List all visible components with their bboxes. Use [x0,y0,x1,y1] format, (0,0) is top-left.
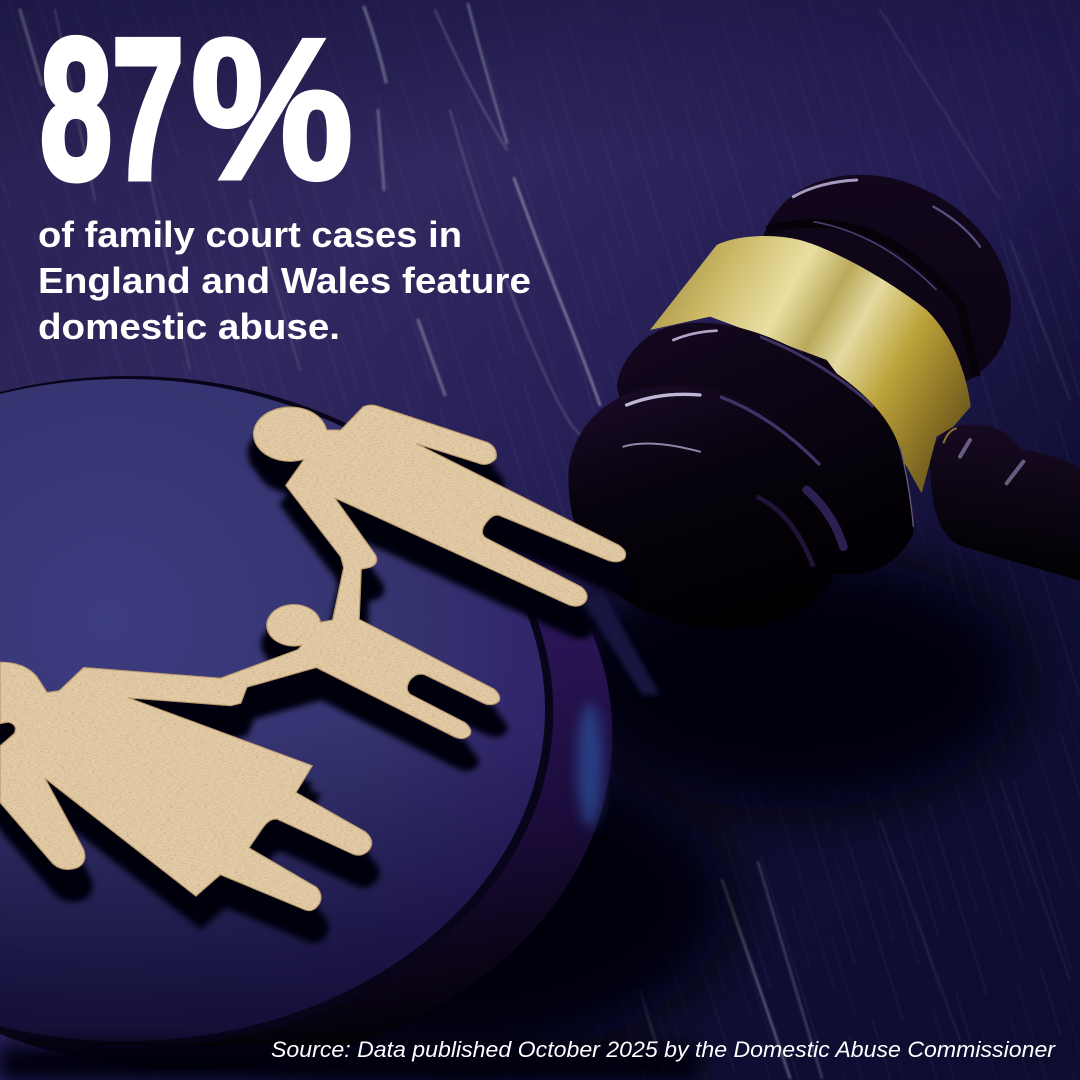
figures: man, child and woman [0,405,626,911]
gavel front face [568,386,844,629]
figure extrusion shadow [0,424,631,941]
statistic description: of family court cases in [38,214,462,255]
family cut-out figures [0,405,631,941]
headline statistic: 87%: % [191,0,353,221]
dark floor strip under block [0,1046,700,1080]
block side wall [0,400,612,1070]
statistic description: domestic abuse. [38,306,340,347]
statistic description [38,214,531,347]
block rim [0,376,553,1048]
sound block [0,376,730,1080]
statistic description: England and Wales feature [38,260,531,301]
gavel handle [930,424,1080,581]
source note: Source: Data published October 2025 by the Domestic Abuse Commissioner [271,1037,1057,1062]
gavel front ring [617,323,913,575]
table strip between figure and gavel shadow [583,590,660,695]
gavel [568,132,1080,629]
block shadow [130,735,730,1065]
headline statistic: 87%: 87 [40,0,184,221]
block top surface [0,379,545,1041]
gavel cast shadow [555,550,1025,810]
gold band [650,236,971,493]
blue side highlight [577,703,603,827]
gavel rear head [720,132,1050,438]
